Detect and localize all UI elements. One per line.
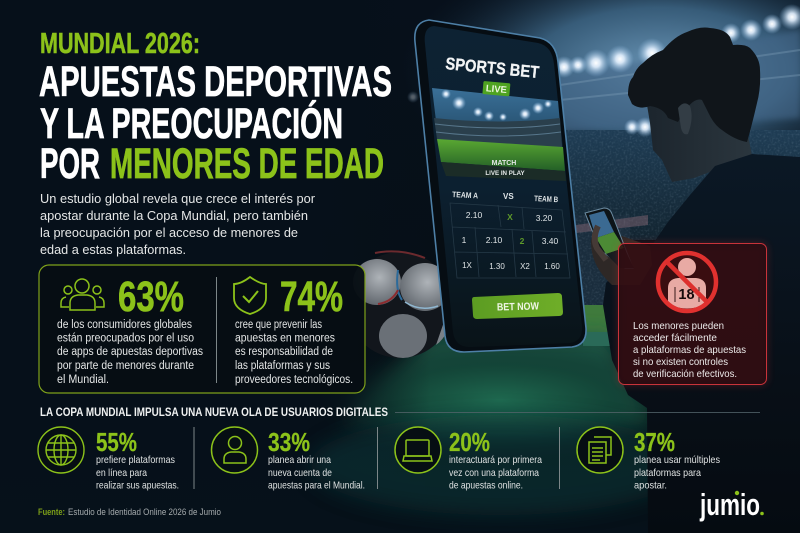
warning text: de verificación efectivos. <box>633 368 737 380</box>
stat 63% description: están preocupados por el uso <box>57 332 194 344</box>
intro text: apostar durante la Copa Mundial, pero también <box>40 209 308 223</box>
stat: 55% <box>38 427 179 492</box>
description: planea abrir una <box>268 455 331 466</box>
hair <box>628 28 760 142</box>
description: plataformas para <box>634 468 701 479</box>
stat 74% description: apuestas en menores <box>235 332 335 344</box>
icon: globe <box>38 427 84 473</box>
phone body <box>415 20 586 352</box>
stat: 20% <box>395 427 542 492</box>
odds table: 2.10 <box>466 210 483 220</box>
stat 74% description: las plataformas y sus <box>235 360 330 372</box>
description: nueva cuenta de <box>268 468 332 479</box>
description: interactuará por primera <box>449 455 542 466</box>
stat 74% description: cree que prevenir las <box>235 319 322 331</box>
figure: 37% <box>634 427 675 457</box>
stat 74%: 74% <box>280 273 343 321</box>
section heading: LA COPA MUNDIAL IMPULSA UNA NUEVA OLA DE USUARIOS DIGITALES <box>40 405 388 419</box>
stat 74% description <box>235 319 353 386</box>
odds table: VS <box>503 192 514 201</box>
description: prefiere plataformas <box>96 455 175 466</box>
title: MUNDIAL 2026: <box>40 28 200 60</box>
icon: people <box>61 279 104 310</box>
warning text: si no existen controles <box>633 356 728 368</box>
title: POR <box>40 140 100 188</box>
source: Estudio de Identidad Online 2026 de Jumio <box>68 507 221 517</box>
odds table: 1.30 <box>489 262 505 271</box>
live badge: LIVE <box>485 83 507 96</box>
stat 63% description: el Mundial. <box>57 374 109 386</box>
soccer ball <box>347 251 453 358</box>
match label <box>485 160 526 177</box>
description: realizar sus apuestas. <box>96 480 179 492</box>
warning text: Los menores pueden <box>633 320 724 332</box>
odds table: 3.20 <box>536 213 553 223</box>
odds table: 1X <box>462 261 473 270</box>
stat 63%: 63% <box>118 273 184 321</box>
source: Fuente: <box>38 507 65 517</box>
phone screen <box>425 26 582 347</box>
icon: no under 18 <box>658 253 716 311</box>
stat 74% description: proveedores tecnológicos. <box>235 374 353 386</box>
icon: laptop <box>395 427 441 473</box>
phone <box>415 20 586 352</box>
warning text: acceder fácilmente <box>633 332 717 344</box>
title <box>39 28 392 188</box>
hoodie <box>603 154 800 533</box>
person with phone <box>585 28 800 533</box>
intro text: la preocupación por el acceso de menores de <box>40 226 298 240</box>
description <box>449 455 542 492</box>
figure: 55% <box>96 427 137 457</box>
stat 63% description <box>57 319 203 386</box>
stat 63% description: de apps de apuestas deportivas <box>57 346 203 358</box>
title: Y LA PREOCUPACIÓN <box>40 99 343 148</box>
description: en línea para <box>96 468 147 479</box>
hand holding phone <box>591 235 652 285</box>
ear <box>678 103 692 134</box>
title: APUESTAS DEPORTIVAS <box>39 58 392 106</box>
odds table: 2 <box>520 236 525 246</box>
match label: MATCH <box>492 160 516 167</box>
odds table: 1 <box>462 235 467 245</box>
live badge <box>482 81 510 96</box>
intro text: edad a estas plataformas. <box>40 243 186 257</box>
sports bet heading: SPORTS BET <box>445 54 541 82</box>
odds table <box>450 190 570 278</box>
stat: 37% <box>577 427 720 492</box>
warning text: a plataformas de apuestas <box>633 344 746 356</box>
intro text <box>40 192 315 257</box>
neck and face <box>647 85 752 182</box>
description: apostar. <box>634 480 667 492</box>
odds table: TEAM A <box>452 190 479 200</box>
stat 63% description: por parte de menores durante <box>57 360 194 372</box>
icon: person <box>212 427 258 473</box>
warning text <box>633 320 746 380</box>
intro text: Un estudio global revela que crece el interés por <box>40 192 315 206</box>
odds table: X2 <box>520 262 530 271</box>
odds table: 2.10 <box>486 235 503 245</box>
warning panel <box>618 243 767 385</box>
icon: shield <box>234 277 266 314</box>
stat 74% description: es responsabilidad de <box>235 346 333 358</box>
figure: 20% <box>449 427 490 457</box>
stat: 33% <box>212 427 365 492</box>
bet now button: BET NOW <box>497 300 539 314</box>
description: vez con una plataforma <box>449 468 539 479</box>
description: apuestas para el Mundial. <box>268 480 365 492</box>
odds table: 1.60 <box>544 262 560 271</box>
odds table: TEAM B <box>534 194 559 204</box>
screen stadium image <box>432 88 566 181</box>
bet now button <box>472 293 563 319</box>
title: MENORES DE EDAD <box>110 140 384 188</box>
figure: 33% <box>268 427 310 457</box>
odds table: X <box>507 212 513 222</box>
panel: key statistics <box>39 265 365 393</box>
stadium lights <box>407 4 800 137</box>
icon: documents <box>577 427 623 473</box>
description: planea usar múltiples <box>634 455 720 466</box>
description <box>96 455 179 492</box>
odds table: 3.40 <box>542 236 559 246</box>
match label: LIVE IN PLAY <box>485 170 526 177</box>
description <box>634 455 720 492</box>
logo: jumio: jumio <box>699 487 760 522</box>
stat 63% description: de los consumidores globales <box>57 319 192 331</box>
icon: no under 18: 18 <box>678 287 695 303</box>
description <box>268 455 365 492</box>
description: de apuestas online. <box>449 480 523 492</box>
